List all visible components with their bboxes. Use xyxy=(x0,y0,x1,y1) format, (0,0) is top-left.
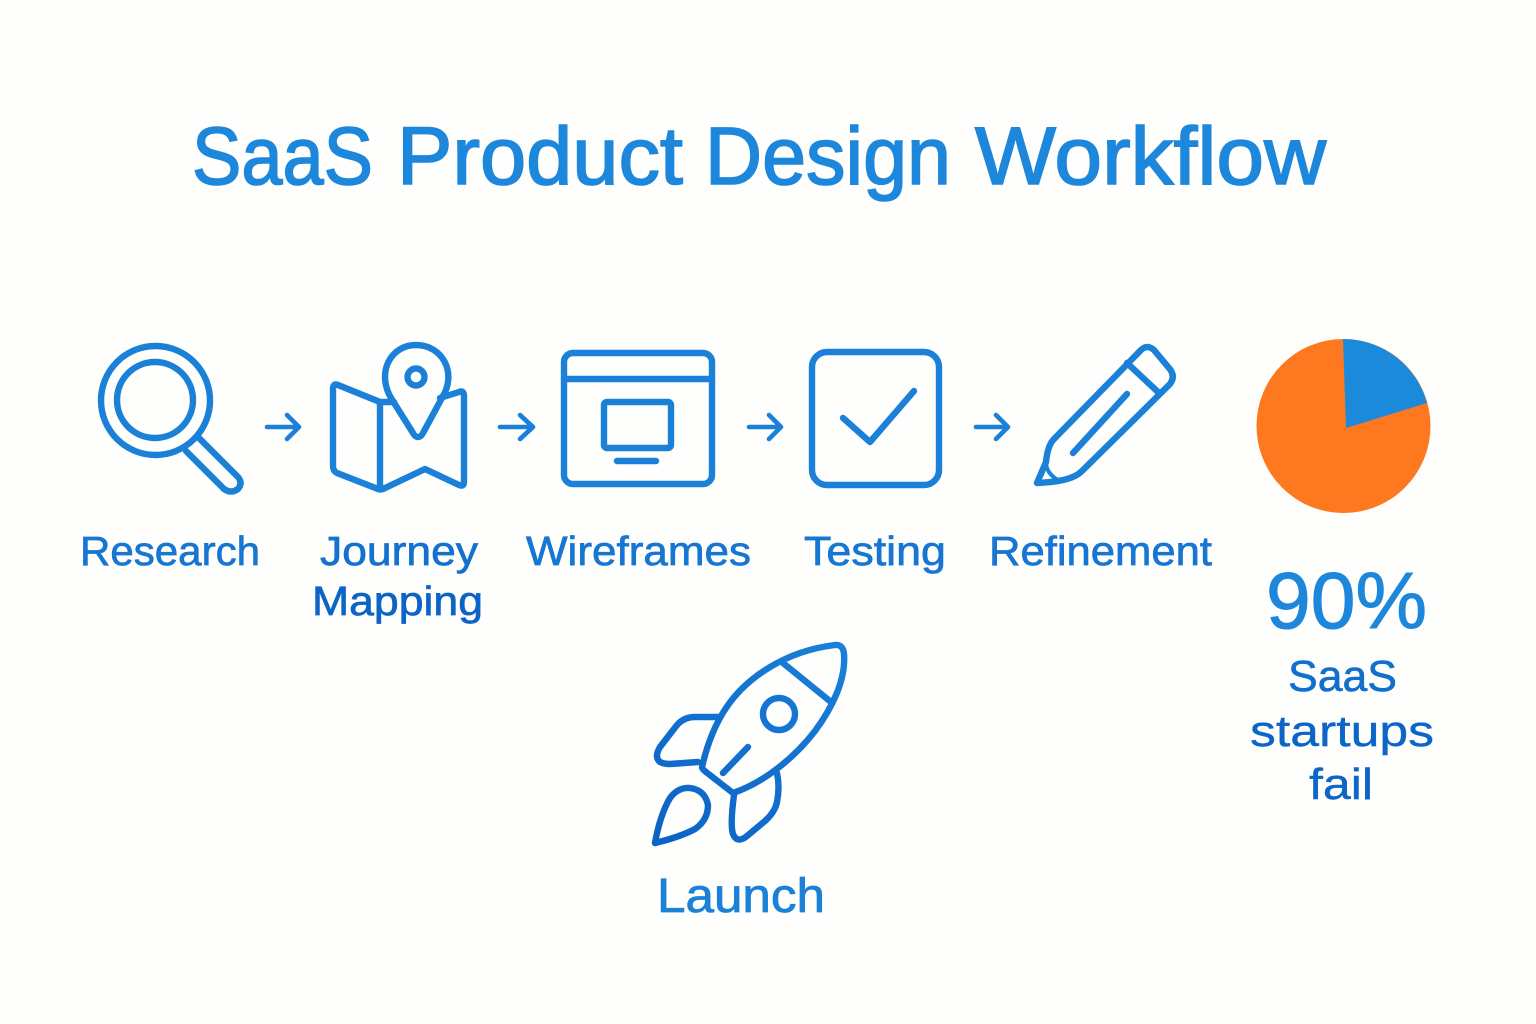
label: wireframes: Wireframes xyxy=(526,528,751,574)
title: Design xyxy=(705,111,951,202)
step: testing xyxy=(804,352,946,574)
pie chart xyxy=(1256,339,1430,513)
arrow: journey mapping to wireframes xyxy=(500,415,533,439)
big number: 90% xyxy=(1266,556,1427,645)
icon: map with pin xyxy=(333,345,464,490)
arrow: testing to refinement xyxy=(976,415,1008,439)
step: research xyxy=(80,346,260,574)
stat caption: fail xyxy=(1309,760,1373,809)
stat: failure rate xyxy=(1250,339,1434,809)
step: journey mapping xyxy=(312,345,483,624)
label: journey mapping: Journey xyxy=(320,528,479,574)
label: launch: Launch xyxy=(657,870,825,923)
icon: rocket xyxy=(655,645,844,843)
title: SaaS xyxy=(192,111,373,202)
stat caption: startups xyxy=(1250,707,1434,756)
step: wireframes xyxy=(526,353,751,574)
title: Workflow xyxy=(975,111,1327,202)
arrow: research to journey mapping xyxy=(267,415,299,439)
label: research: Research xyxy=(80,528,260,574)
step: launch xyxy=(655,645,844,923)
icon: pencil xyxy=(1037,347,1173,483)
icon: magnifying glass xyxy=(101,346,240,492)
step: refinement xyxy=(989,347,1213,574)
label: refinement: Refinement xyxy=(989,528,1213,574)
label: testing: Testing xyxy=(804,528,946,574)
label: journey mapping: Mapping xyxy=(312,578,483,624)
icon: check box xyxy=(812,352,939,485)
label: journey mapping xyxy=(312,528,483,624)
title xyxy=(192,111,1327,202)
stat caption: SaaS xyxy=(1288,652,1397,701)
arrow: wireframes to testing xyxy=(749,415,781,439)
stat caption xyxy=(1250,652,1434,809)
icon: browser window with monitor xyxy=(564,353,712,484)
title: Product xyxy=(397,111,683,202)
